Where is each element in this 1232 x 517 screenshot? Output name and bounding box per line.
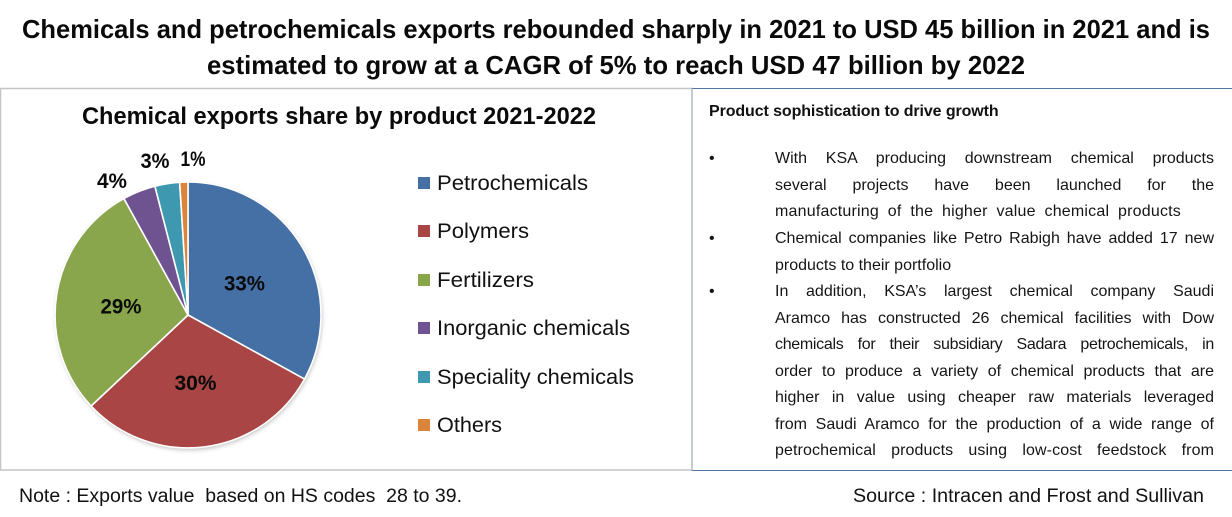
legend: polymers: Polymers [437,220,529,243]
legend: others: Others [437,414,502,437]
text block: bullet 3: from Saudi Aramco for the production of a wide range of [775,416,1214,432]
text block: bullet 2: Chemical companies like Petro Rabigh have added 17 new [775,230,1214,247]
pie value labels: 33% [224,272,265,296]
slice: others 1% [180,182,188,315]
text block: bullet 3: order to produce a variety of chemical products that are [775,362,1214,380]
text block: bullet 2 [709,230,1214,274]
legend: inorganic chemicals: Inorganic chemicals [437,317,630,340]
title: estimated to grow at a CAGR of 5% to reach USD 47 billion by 2022 [207,50,1025,80]
panel heading: Product sophistication to drive growth [709,103,999,120]
chart heading: Chemical exports share by product 2021-2022 [82,103,596,130]
text block: bullet 1 [709,150,1214,220]
pie value labels: 30% [174,372,217,395]
legend: fertilizers: Fertilizers [437,269,534,292]
legend: petrochemicals: Petrochemicals [437,172,588,195]
pie value labels: 3% [140,150,170,173]
title: Chemicals and petrochemicals exports rebounded sharply in 2021 to USD 45 billion in 2021 and is [22,14,1210,44]
text block: bullet 1: several projects have been launched for the [775,176,1214,194]
slice: petrochemicals 33% [188,182,321,379]
text block: bullet 1: manufacturing of the higher value chemical products [775,203,1181,220]
slice: fertilizers 29% [55,198,188,406]
source: Source : Intracen and Frost and Sullivan [853,486,1204,507]
legend [418,172,634,437]
text block: bullet 2: • [709,230,715,247]
text block: bullet 3: Aramco has constructed 26 chemical facilities with Dow [775,310,1214,326]
slice: speciality chemicals 3% [155,182,188,315]
pie chart [55,182,322,450]
slice: polymers 30% [91,315,304,448]
text block: bullet 3 [709,283,1214,459]
text block: bullet 3: • [709,283,715,300]
text block: bullet 3: In addition, KSA’s largest chemical company Saudi [775,283,1214,300]
pie value labels [97,148,265,395]
text block: bullet 3: petrochemical products using low-cost feedstock from [775,442,1214,459]
title [22,14,1210,80]
text block: bullet 3: higher in value using cheaper raw materials leveraged [775,389,1214,406]
text block: bullet 2: products to their portfolio [775,256,951,274]
slice: inorganic chemicals 4% [124,186,188,315]
pie value labels: 4% [97,170,127,193]
chart frame [0,88,692,470]
note: Note : Exports value based on HS codes 28 to 39. [19,486,462,507]
legend: speciality chemicals: Speciality chemicals [437,366,634,389]
text block: bullet 3: chemicals for their subsidiary Sadara petrochemicals, in [775,336,1214,353]
text block: bullet 1: • [709,150,715,167]
panel: product sophistication text [691,88,1232,471]
pie value labels: 1% [180,148,206,171]
text block: bullet 1: With KSA producing downstream chemical products [775,150,1214,167]
pie value labels: 29% [100,296,142,318]
